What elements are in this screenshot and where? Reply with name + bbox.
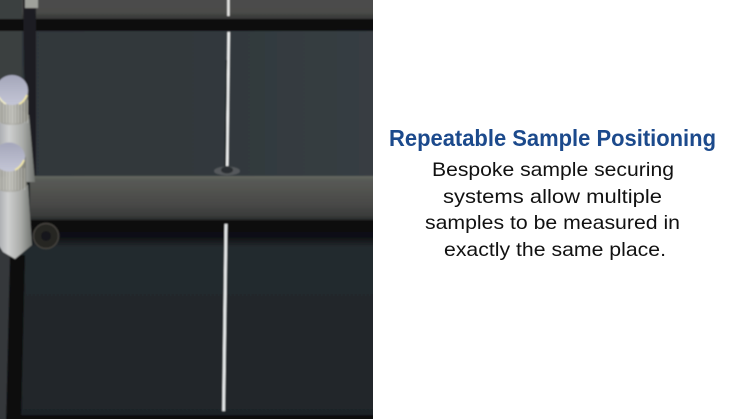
panel: text	[389, 125, 716, 261]
screw	[33, 223, 59, 249]
body text: Bespoke sample securing	[432, 159, 674, 181]
slit: upper plate	[226, 32, 230, 166]
body text: systems allow multiple	[443, 186, 662, 208]
shadow beneath centre bar	[31, 220, 373, 240]
body text: exactly the same place.	[444, 239, 666, 261]
lower plate	[0, 245, 380, 416]
heading: Repeatable Sample Positioning	[389, 125, 716, 151]
body text: samples to be measured in	[425, 212, 680, 234]
knob: front	[0, 142, 32, 259]
knob: rear	[0, 75, 35, 182]
body text	[425, 159, 680, 261]
slit: top	[227, 0, 230, 16]
slit: lower plate	[222, 224, 227, 411]
left vertical rail	[0, 0, 38, 419]
slit mount above bar	[214, 166, 240, 176]
upper plate	[0, 31, 380, 177]
top bar	[0, 0, 380, 19]
centre bar	[30, 176, 380, 220]
panel: photograph of sample positioning fixture	[0, 0, 380, 419]
